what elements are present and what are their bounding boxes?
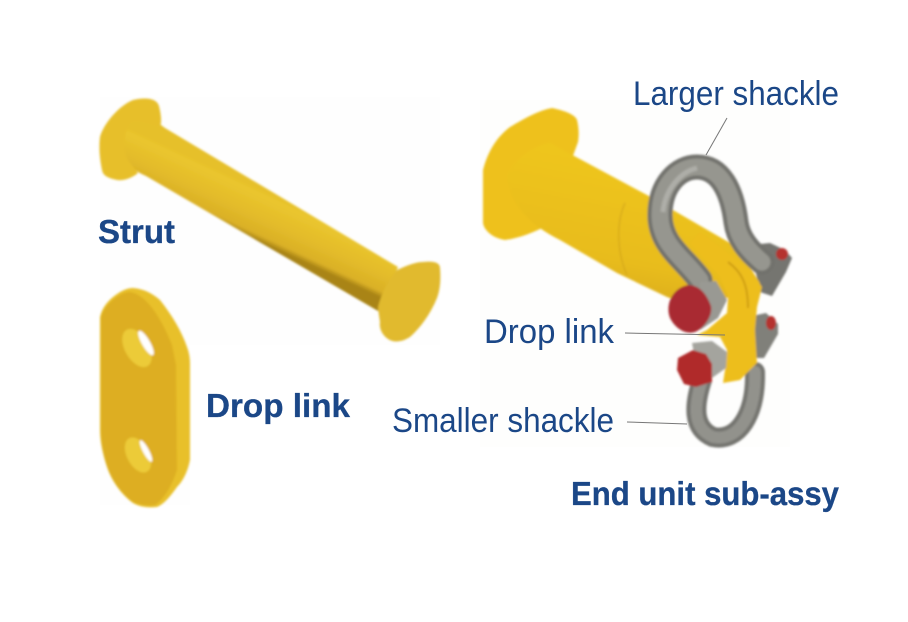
panel: end unit assembly (483, 108, 792, 438)
label: drop link part: Drop link (206, 387, 351, 424)
leader: smaller shackle (627, 422, 687, 424)
drop link (690, 232, 762, 383)
label: smaller shackle: Smaller shackle (392, 402, 614, 440)
leader: larger shackle (706, 118, 727, 155)
strut left flange (99, 98, 161, 180)
lower bolt shank (692, 341, 727, 384)
panel: strut (99, 98, 440, 341)
link body side (100, 288, 190, 507)
end flange (483, 108, 579, 240)
strut shaft (120, 116, 398, 311)
tube (507, 143, 760, 310)
label: drop link callout: Drop link (484, 313, 615, 351)
lower shackle (696, 372, 755, 438)
image background patches (100, 97, 790, 505)
tube collar (619, 203, 627, 275)
strut right flange (378, 262, 440, 341)
back nut lower (752, 313, 778, 358)
lower bolt head (677, 350, 712, 387)
leader: drop link (625, 333, 725, 335)
panel: drop link part (100, 288, 190, 507)
larger shackle (660, 167, 762, 280)
lower hole (119, 433, 157, 477)
label: strut: Strut (98, 213, 175, 250)
label: larger shackle: Larger shackle (633, 75, 839, 113)
label: end unit sub-assy: End unit sub-assy (571, 475, 840, 512)
link front face (101, 292, 177, 505)
upper bolt head (668, 285, 711, 333)
back nut upper (750, 243, 792, 296)
upper bolt shank (700, 281, 727, 330)
upper hole (116, 324, 158, 372)
